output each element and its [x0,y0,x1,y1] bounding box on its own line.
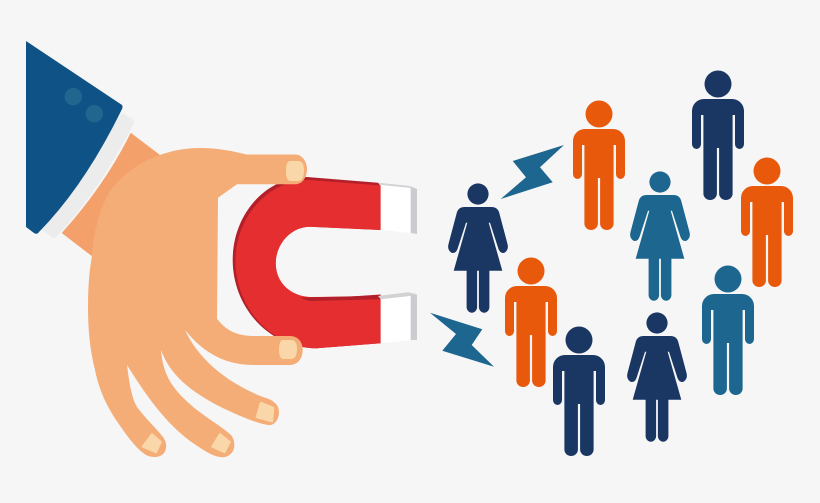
magnet [233,177,417,348]
shirt cuff [41,113,134,238]
sleeve button [65,88,82,105]
figure: orange man far right [741,158,793,287]
wrist [62,133,160,256]
figure: orange man top centre [573,100,625,230]
palm and fingers [88,148,307,457]
figure: navy woman left [448,183,508,313]
nail: upper finger [286,161,304,181]
jacket sleeve [26,41,122,234]
figure: navy woman bottom [627,312,687,442]
magnet shadow edge [233,177,381,348]
nail: little finger [143,434,160,452]
magnet body [236,180,381,348]
lower limb dark inner edge [300,296,381,301]
icon: hand holding magnet [26,41,417,457]
icon: upper lightning bolt [501,145,564,199]
nail: middle finger [257,403,273,421]
nail: lower finger [279,340,297,359]
figure: orange man lower left [505,258,557,387]
figure: navy man top right [692,70,744,200]
figure: navy man bottom [553,326,605,456]
sleeve button [86,105,103,122]
upper magnet pole [378,183,417,234]
figure: teal man right [702,266,754,395]
figure: teal woman centre [630,171,690,301]
nail: ring finger [212,434,230,452]
icon: lower lightning bolt [430,313,494,367]
lower magnet pole [378,292,417,343]
